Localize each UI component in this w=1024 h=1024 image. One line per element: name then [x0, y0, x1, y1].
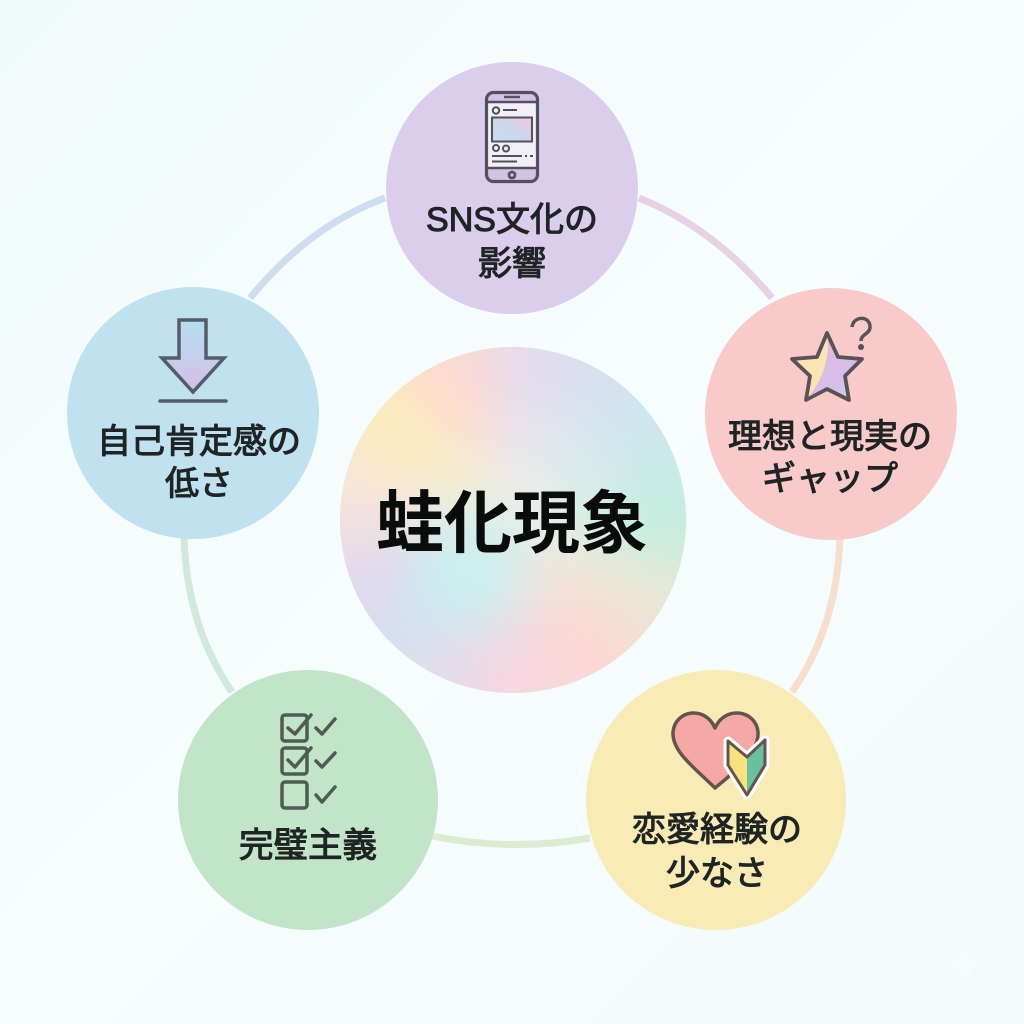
icon: heart with beginner mark: [673, 713, 765, 795]
label: [728, 418, 932, 498]
label: 影響: [478, 245, 546, 283]
central title: 蛙化現象: [376, 486, 648, 562]
label: ギャップ: [762, 460, 898, 498]
node: SNS文化の影響: [386, 62, 638, 314]
label: SNS文化の: [426, 201, 598, 239]
node: 理想と現実のギャップ: [705, 288, 957, 540]
label: [97, 423, 301, 503]
node: 自己肯定感の低さ: [67, 287, 319, 539]
node: 完璧主義: [178, 670, 438, 930]
label: [632, 811, 802, 893]
icon: star with question mark: [792, 318, 870, 400]
icon: checklist: [282, 715, 335, 808]
icon: smartphone: [486, 92, 538, 182]
label: 理想と現実の: [728, 418, 932, 456]
label: 自己肯定感の: [97, 423, 301, 461]
node: 恋愛経験の少なさ: [586, 670, 846, 930]
label: [426, 201, 598, 283]
label: 恋愛経験の: [632, 811, 802, 849]
label: 完璧主義: [239, 827, 377, 865]
icon: down arrow: [160, 320, 226, 401]
central circle: [340, 347, 686, 693]
label: 低さ: [165, 465, 233, 503]
label: 少なさ: [666, 855, 768, 893]
watermark sparkle: [945, 945, 985, 985]
